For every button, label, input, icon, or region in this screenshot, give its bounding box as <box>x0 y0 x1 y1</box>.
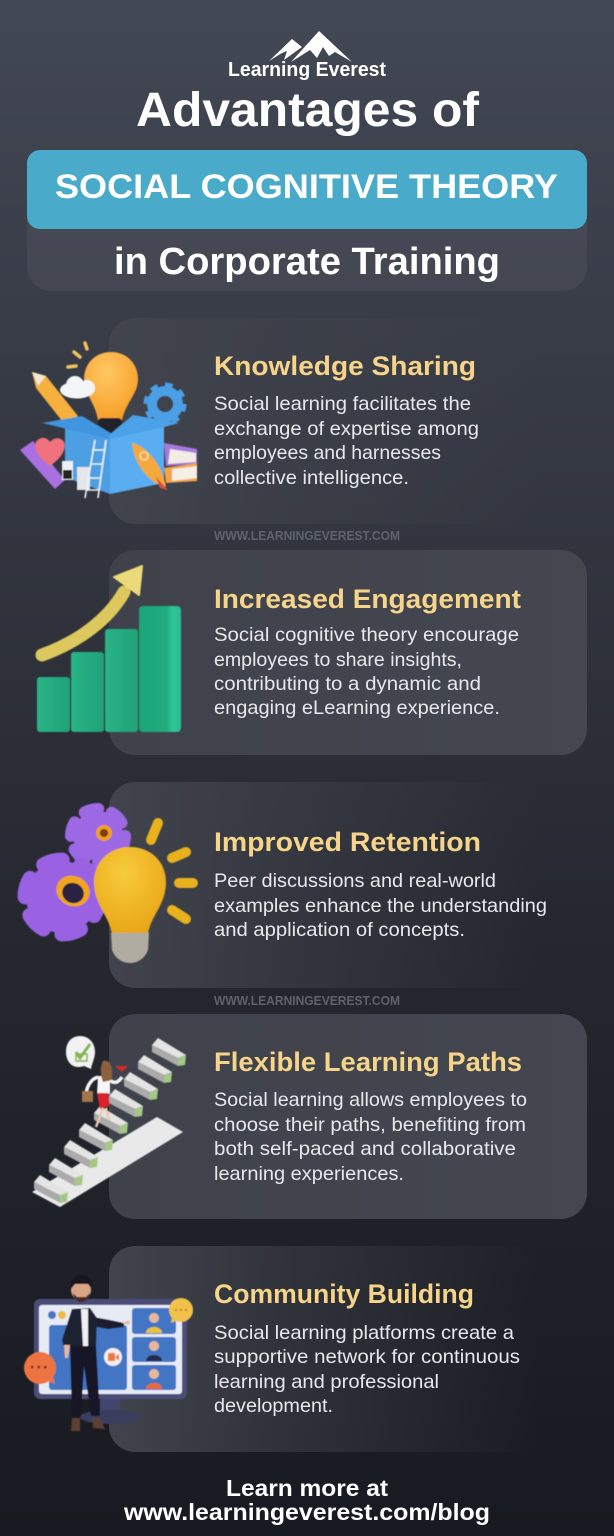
yellow speech bubble <box>169 1298 193 1323</box>
large gear <box>25 860 99 934</box>
panel: Knowledge Sharing <box>109 318 587 524</box>
icon: gears and light bulb <box>25 809 193 963</box>
body text: and application of concepts. <box>214 919 465 941</box>
ladder <box>85 440 106 498</box>
cloud <box>60 376 95 398</box>
pencil <box>32 372 78 426</box>
icon: open box with light bulb <box>20 343 197 498</box>
labels on box <box>62 461 90 490</box>
banner: Social Cognitive Theory <box>27 150 587 229</box>
subtitle: in Corporate Training: in Corporate Training <box>114 241 500 283</box>
presenter <box>62 1275 130 1431</box>
rays <box>151 823 193 919</box>
heading: Community Building <box>214 1279 474 1309</box>
body text: employees to share insights, <box>214 649 462 671</box>
footer call to action: Learn more at <box>226 1475 388 1501</box>
watermark: WWW.LEARNINGEVEREST.COM <box>214 994 400 1008</box>
woman <box>82 1061 128 1127</box>
body text <box>214 624 519 719</box>
body text: collective intelligence. <box>214 467 409 489</box>
body text <box>214 870 547 941</box>
body text: learning experiences. <box>214 1163 404 1185</box>
heading: Increased Engagement <box>214 584 521 614</box>
arrow <box>42 566 142 655</box>
participant tiles <box>132 1308 176 1390</box>
banner text: SOCIAL COGNITIVE THEORY <box>55 168 558 206</box>
books <box>164 443 197 483</box>
heading: Improved Retention <box>214 827 481 857</box>
small gear <box>71 809 125 863</box>
body text: employees and harnesses <box>214 442 441 464</box>
bulb <box>84 352 138 436</box>
body text: choose their paths, benefiting from <box>214 1114 526 1136</box>
body text: Social learning allows employees to <box>214 1089 527 1111</box>
panel: Improved Retention <box>109 782 587 988</box>
main video pane <box>49 1325 127 1390</box>
bars <box>37 606 181 732</box>
rays <box>68 343 87 367</box>
monitor <box>34 1299 187 1399</box>
logo wordmark: Learning Everest <box>228 59 386 81</box>
title: Advantages of: Advantages of <box>136 84 480 137</box>
heart <box>35 438 65 466</box>
orange speech bubble <box>24 1352 56 1384</box>
body text: both self-paced and collaborative <box>214 1138 516 1160</box>
body text: learning and professional <box>214 1371 439 1393</box>
heading: Flexible Learning Paths <box>214 1047 522 1077</box>
screen dots <box>48 1311 66 1319</box>
icon: mountain peaks <box>269 31 352 62</box>
body text <box>214 1089 527 1185</box>
body text <box>214 1322 520 1417</box>
ruler <box>20 441 65 489</box>
steps <box>34 1038 186 1203</box>
body text: Social learning platforms create a <box>214 1322 514 1344</box>
footer call to action <box>123 1475 490 1525</box>
stair base <box>32 1117 183 1207</box>
heading: Knowledge Sharing <box>214 351 476 381</box>
gear <box>146 385 184 423</box>
body text: Peer discussions and real-world <box>214 870 496 892</box>
subtitle backing panel <box>27 190 587 291</box>
body text: engaging eLearning experience. <box>214 697 500 719</box>
body text: development. <box>214 1395 333 1417</box>
bulb <box>94 847 166 963</box>
panel: Community Building <box>109 1246 587 1452</box>
footer call to action: www.learningeverest.com/blog <box>123 1499 490 1525</box>
body text: exchange of expertise among <box>214 418 479 440</box>
icon: woman climbing stairs <box>32 1036 186 1207</box>
box <box>42 415 179 494</box>
body text: examples enhance the understanding <box>214 895 547 917</box>
logo: Learning Everest <box>228 31 386 81</box>
monitor stand <box>80 1398 140 1424</box>
body text: supportive network for continuous <box>214 1346 520 1368</box>
body text: Social cognitive theory encourage <box>214 624 519 646</box>
icon: presenter with video call screen <box>24 1275 193 1431</box>
panel: Flexible Learning Paths <box>109 1014 587 1219</box>
body text: Social learning facilitates the <box>214 393 471 415</box>
body text <box>214 393 479 489</box>
speech bubble with check <box>66 1036 95 1069</box>
watermark: WWW.LEARNINGEVEREST.COM <box>214 529 400 543</box>
icon: growth bar chart with arrow <box>37 566 181 732</box>
rocket <box>132 443 168 490</box>
panel: Increased Engagement <box>109 550 587 755</box>
body text: contributing to a dynamic and <box>214 673 481 695</box>
video button <box>104 1348 122 1366</box>
